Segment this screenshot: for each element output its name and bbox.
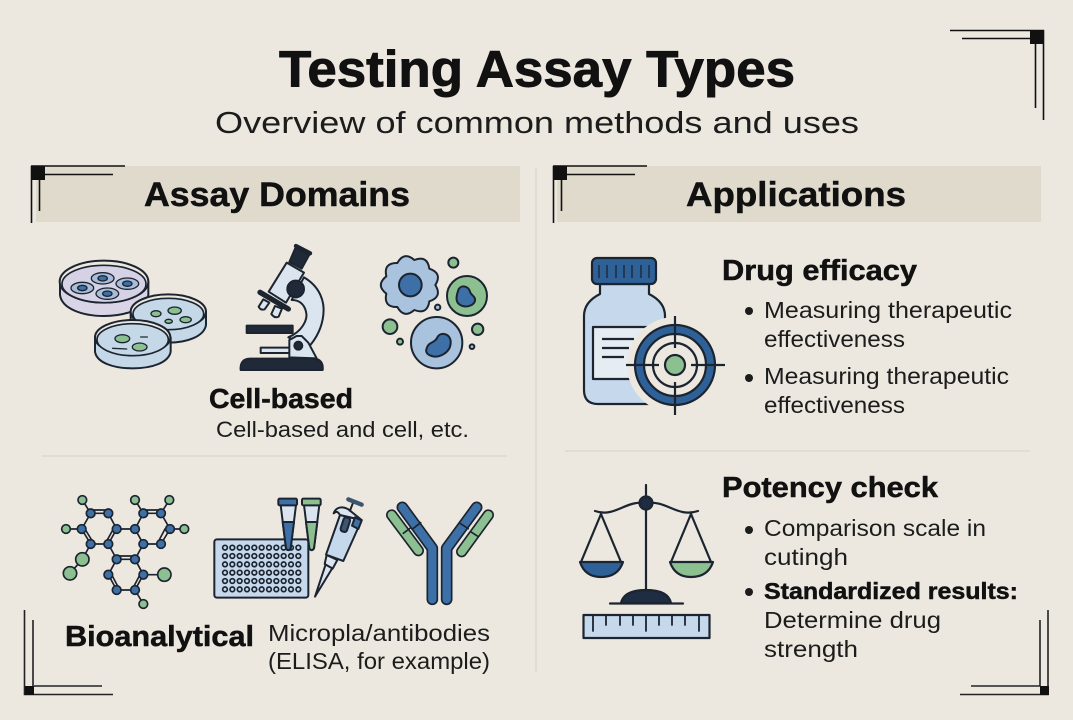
corner ornament: bottom right [960, 610, 1049, 695]
icon: antibody [392, 507, 488, 599]
icon: balance scale with ruler [580, 485, 713, 638]
bullet list: potency check: Comparison scale in [764, 515, 986, 541]
heading: drug efficacy: Drug efficacy [722, 255, 917, 287]
bullet list: drug efficacy [745, 297, 1012, 418]
bullet list: drug efficacy: effectiveness [764, 326, 905, 352]
heading: applications: Applications [686, 176, 906, 214]
heading: assay domains: Assay Domains [144, 176, 410, 214]
bullet list: drug efficacy: Measuring therapeutic [764, 297, 1012, 323]
title: Testing Assay Types [279, 40, 795, 98]
bullet list: potency check: Standardized results: [764, 578, 1018, 604]
label: cell-based: Cell-based [209, 383, 353, 414]
icon: bottle with target [584, 258, 725, 415]
label: bioanalytical: Bioanalytical [65, 621, 254, 653]
bullet list: potency check [745, 515, 1018, 662]
corner ornament: applications header [553, 166, 647, 223]
description: cell-based: Cell-based and cell, etc. [216, 417, 469, 442]
description: bioanalytical: (ELISA, for example) [268, 648, 490, 674]
bullet list: potency check: cutingh [764, 544, 848, 570]
header band: assay domains [36, 166, 520, 222]
description: bioanalytical: Micropla/antibodies [268, 620, 490, 646]
icon: microscope [241, 246, 324, 370]
icon: cells [381, 256, 487, 368]
icon: molecule [62, 496, 189, 608]
bullet list: potency check: strength [764, 636, 858, 662]
corner ornament: bottom left [24, 610, 113, 695]
bullet list: drug efficacy: effectiveness [764, 392, 905, 418]
subtitle: Overview of common methods and uses [215, 105, 859, 140]
icon: petri dishes [60, 261, 206, 368]
corner ornament: assay domains header [31, 166, 125, 223]
corner ornament: top right [950, 30, 1044, 120]
bullet list: potency check: Determine drug [764, 607, 941, 633]
icon: microplate, tubes and pipette [214, 499, 362, 598]
header band: applications [557, 166, 1041, 222]
description: bioanalytical [268, 620, 490, 674]
bullet list: drug efficacy: Measuring therapeutic [764, 363, 1009, 389]
heading: potency check: Potency check [722, 472, 939, 504]
